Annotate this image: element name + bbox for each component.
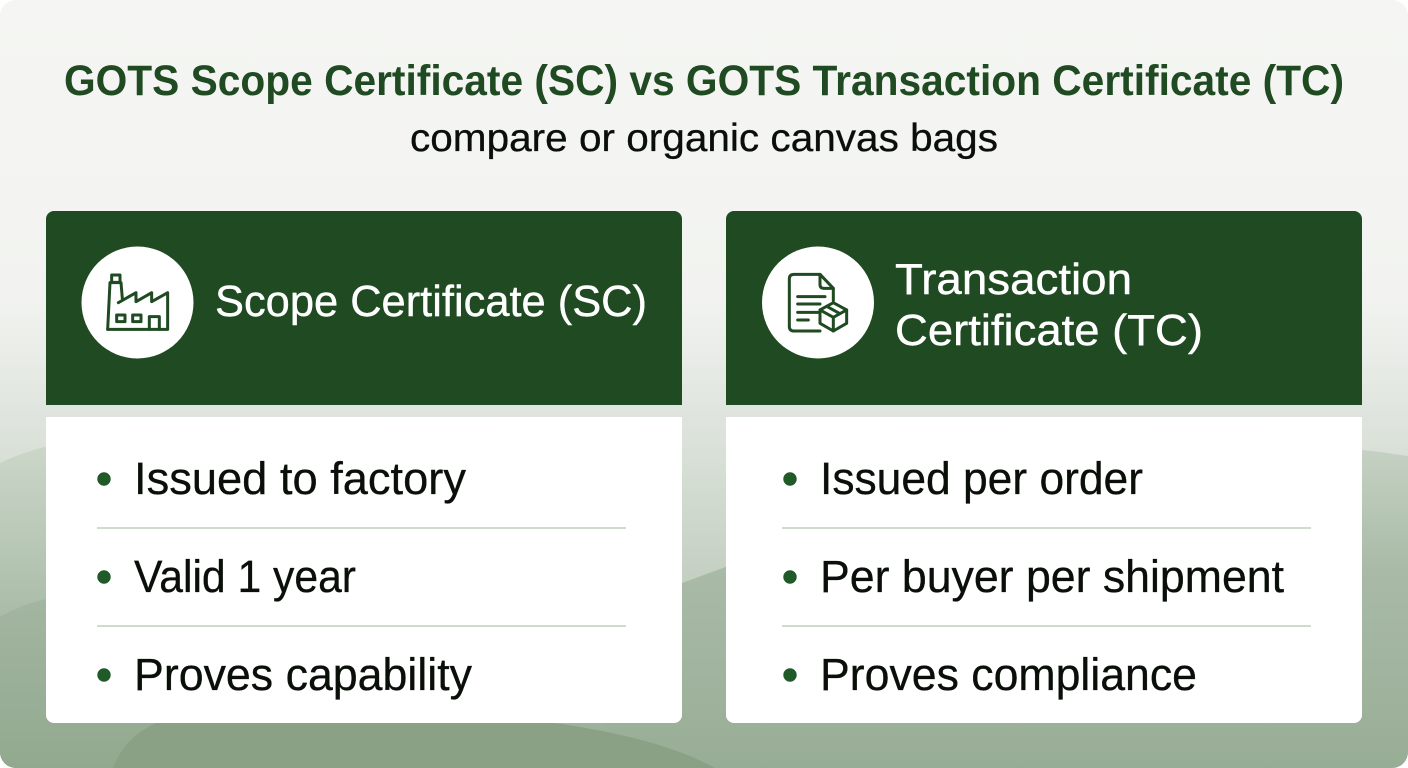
list item: Proves capability: Proves capability: [134, 649, 472, 700]
list item: Valid 1 year: Valid 1 year: [134, 551, 356, 602]
subtitle: compare or organic canvas bags: [410, 117, 998, 160]
header label: Transaction Certificate (TC): Certificate (TC): [895, 306, 1203, 355]
panel body: Scope Certificate list: [46, 417, 682, 723]
panel header: Scope Certificate: [46, 211, 682, 405]
panel: Transaction Certificate: [726, 211, 1362, 723]
title: GOTS Scope Certificate (SC) vs GOTS Transaction Certificate (TC): [64, 57, 1344, 105]
icon: document with box: [762, 246, 874, 358]
header label: Scope Certificate (SC): Scope Certificate (SC): [215, 277, 647, 326]
icon: factory: [82, 246, 194, 358]
panel: Scope Certificate: [46, 211, 682, 723]
header label: Transaction Certificate (TC): Transaction: [895, 255, 1132, 304]
header label: Transaction Certificate (TC): [895, 255, 1203, 355]
panel body: Transaction Certificate list: [726, 417, 1362, 723]
panel header: Transaction Certificate: [726, 211, 1362, 405]
list item: Proves compliance: Proves compliance: [820, 649, 1197, 700]
list item: Per buyer per shipment: Per buyer per shipment: [820, 551, 1284, 602]
list item: Issued to factory: Issued to factory: [134, 453, 466, 504]
list item: Issued per order: Issued per order: [820, 453, 1143, 504]
